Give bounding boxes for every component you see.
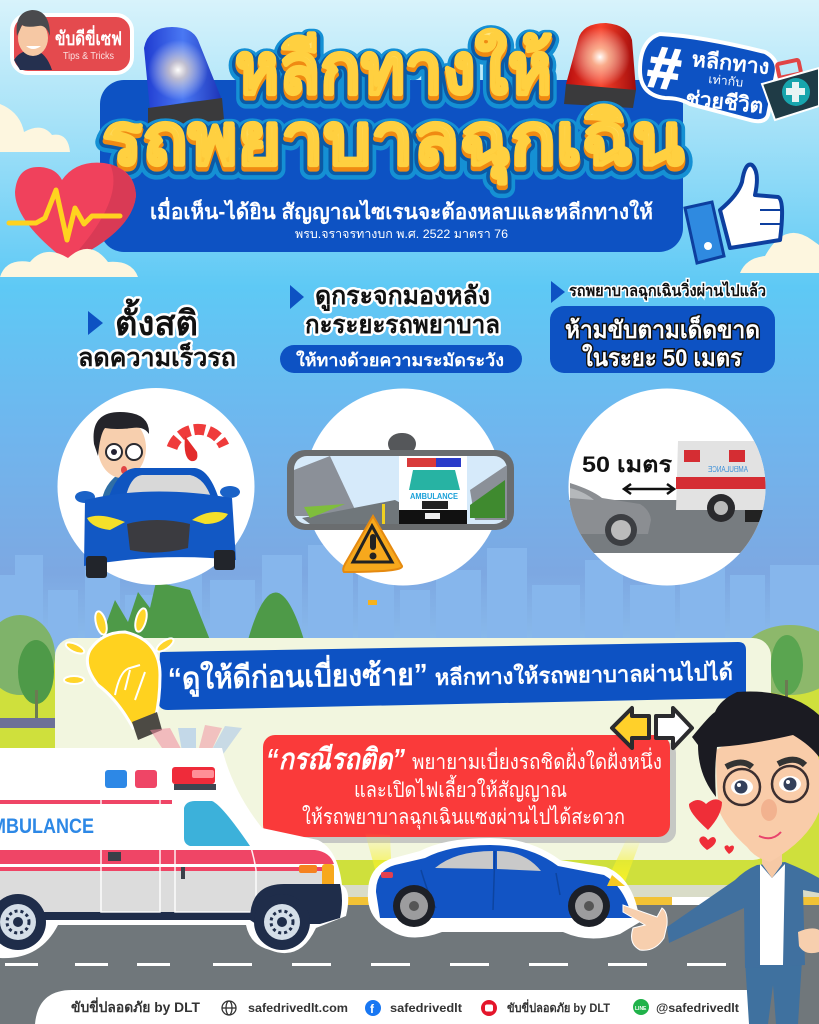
red callout: พยายามเบี่ยงรถชิดฝั่งใดฝั่งหนึ่ง [412,747,662,774]
red callout: ให้รถพยาบาลฉุกเฉินแซงผ่านไปได้สะดวก [302,805,625,830]
illustration circle 2: rear-view mirror [287,388,514,586]
road [0,897,819,1024]
step 1 heading: ลดความเร็วรถ [78,342,236,372]
footer bar: ขับขี่ปลอดภัย by DLT [71,997,200,1015]
face [716,732,819,862]
ambulance in mirror [399,456,467,524]
mouth [759,832,781,838]
title [102,28,684,190]
title: หลีกทางให้ [235,33,552,113]
step 3 heading: ห้ามขับตามเด็ดขาด [565,315,760,344]
logo mascot [14,10,52,70]
ambulance in mirror: AMBULANCE [410,492,459,501]
blue car front [75,468,240,578]
step 3 pill [550,306,775,373]
icon: first aid kit [762,60,819,120]
illustration circle 3: 50 metre gap [568,388,771,586]
hashtag badge: หลีกทาง [690,47,771,79]
tilted blue banner: “ดูให้ดีก่อนเบี่ยงซ้าย” [167,652,428,698]
subtitle: เมื่อเห็น-ได้ยิน สัญญาณไซเรนจะต้องหลบและหลีกทางให้ [150,196,653,225]
shirt [760,864,785,965]
blue title banner [100,80,683,252]
arrow marker 2 [290,285,304,309]
warning triangle [343,516,402,572]
title: หลีกทางให้ [235,28,552,108]
tilted blue banner: หลีกทางให้รถพยาบาลผ่านไปได้ [435,659,733,690]
title: รถพยาบาลฉุกเฉิน [102,100,684,185]
grey car [570,483,651,546]
pointing hand [623,905,667,950]
headlight glows [365,833,640,882]
logo badge [12,10,132,73]
footer bar: @safedrivedlt [656,1001,739,1015]
hashtag badge: # [644,34,685,103]
step 1 heading: ตั้งสติ [115,298,198,343]
other hand [798,928,819,953]
icon: thumbs up [685,165,782,263]
hashtag badge: เท่ากับ [708,72,744,90]
neck [762,850,782,878]
red callout: “กรณีรถติด” [266,743,405,776]
logo badge: Tips & Tricks [63,51,114,62]
eyebrows [726,762,752,767]
icon: facebook: f [370,1002,375,1016]
legs [745,960,802,1024]
step 2 heading: ดูกระจกมองหลัง [315,282,490,312]
icon: light bulb [64,607,175,740]
logo text: ขับดีขี่เซฟ [55,25,122,50]
tilted blue banner [158,642,746,710]
road in circle [568,500,768,553]
title: หลีกทางให้ [235,32,552,112]
title: รถพยาบาลฉุกเฉิน [102,104,684,189]
icon: line [633,999,649,1015]
city skyline [0,545,819,650]
ambulance [676,441,771,522]
hair [692,691,819,797]
step 2 heading [280,282,522,373]
driver [94,412,158,510]
title: หลีกทางให้ [235,32,552,112]
ambulance [0,748,348,958]
hashtag badge: ช่วยชีวิต [684,86,765,118]
icon: red siren [564,23,636,108]
small yellow marker [368,600,377,605]
footer bar: ขับขี่ปลอดภัย by DLT [507,999,611,1015]
title: รถพยาบาลฉุกเฉิน [102,104,684,189]
illustration circle 1: driver in car [58,388,254,585]
step 3 heading: ในระยะ 50 เมตร [582,343,742,372]
jacket and arms [667,862,819,968]
hearts [689,799,734,854]
cloud under heart [0,249,138,277]
step 3 heading: รถพยาบาลฉุกเฉินวิ่งผ่านไปแล้ว [569,279,766,301]
arrow marker 1 [88,311,103,335]
footer bar: safedrivedlt [390,1001,462,1015]
hashtag badge [640,34,777,121]
step 2 heading: ให้ทางด้วยความระมัดระวัง [296,350,504,370]
icon: heart with pulse [9,163,136,262]
distance label: 50 เมตร [582,452,672,477]
red callout: และเปิดไฟเลี้ยวให้สัญญาณ [354,775,567,802]
blue car side view [368,838,640,939]
direction arrows [612,708,692,748]
footer bar [35,990,760,1024]
footer bar: safedrivedlt.com [248,1001,348,1015]
step 2 pill [280,345,522,373]
siren light beams [150,725,242,778]
cream content panel [55,638,771,860]
presenter character [623,691,819,1024]
glasses and eyes [724,766,808,805]
legal reference: พรบ.จราจรทางบก พ.ศ. 2522 มาตรา 76 [295,227,508,241]
speedometer [172,429,224,461]
siren on ambulance [172,767,216,790]
red callout [263,735,676,843]
ambulance: ƎƆИA⅃UᗺMA [708,465,749,474]
step 3 heading [550,279,775,373]
clouds [0,104,819,273]
wheels [0,894,310,950]
icon: facebook [365,1000,381,1016]
landscape: grass and trees [0,582,819,897]
step 2 heading: กะระยะรถพยาบาล [305,311,500,339]
double arrow [624,484,674,494]
nose [761,799,777,821]
title: รถพยาบาลฉุกเฉิน [102,105,684,190]
icon: youtube [481,1000,497,1016]
icon: line: LINE [635,1006,647,1012]
icon: blue siren [144,27,224,126]
icon: globe [222,1001,236,1015]
mirror [287,450,514,530]
arrow marker 3 [551,281,565,303]
step 1 heading [78,298,236,372]
